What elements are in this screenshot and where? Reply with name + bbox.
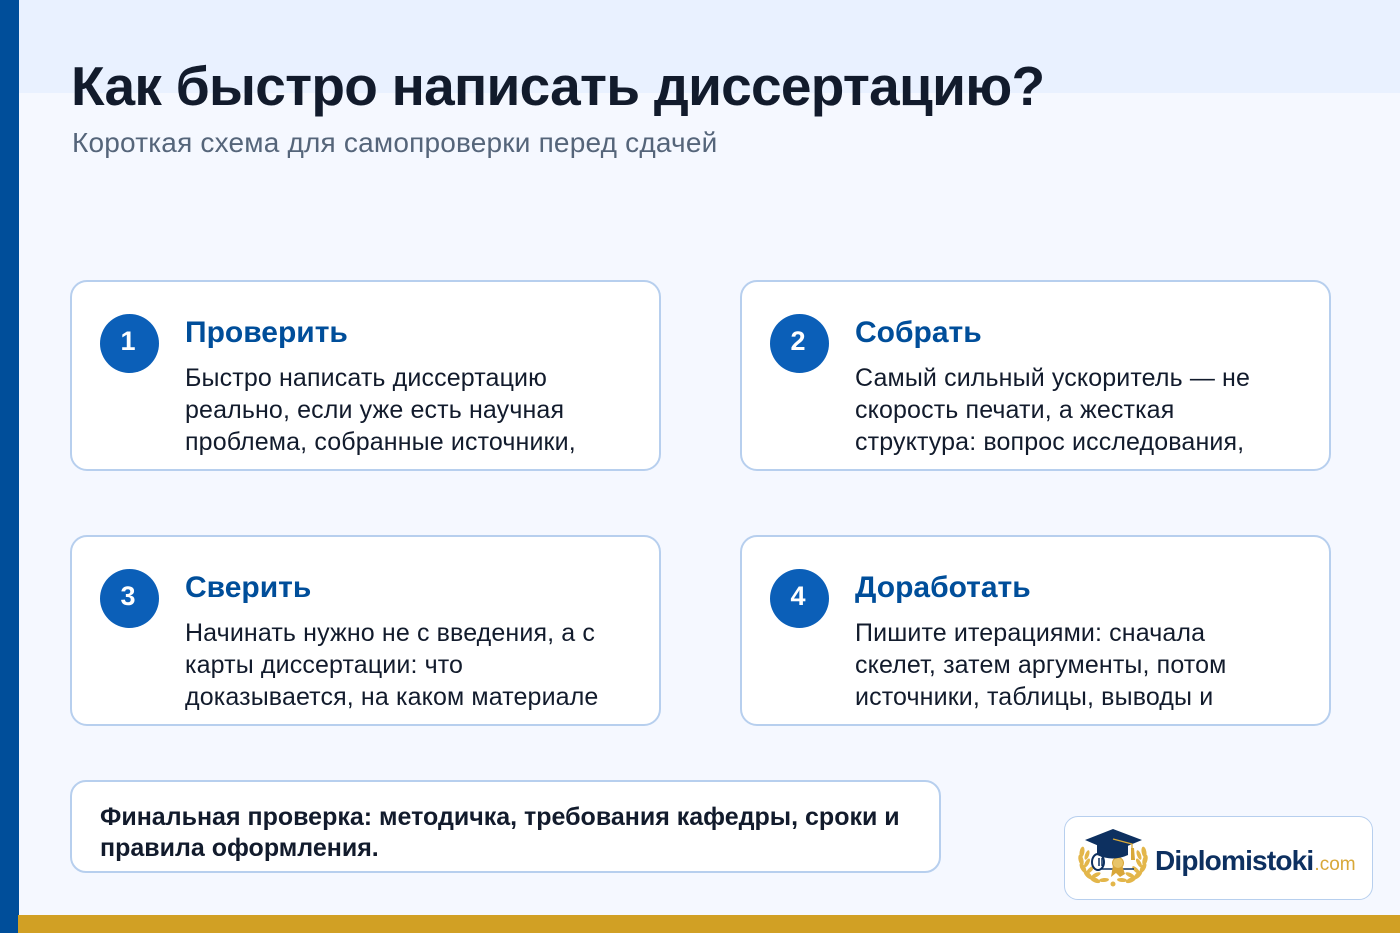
step 4 number <box>770 569 829 628</box>
subtitle: Короткая схема для самопроверки перед сдачей <box>72 127 717 158</box>
step 1 number <box>100 314 159 373</box>
step 2 heading: Собрать <box>855 316 982 349</box>
step 1 text: реально, если уже есть научная <box>185 396 564 424</box>
step 4 text <box>855 619 1226 711</box>
step 3 text: карты диссертации: что <box>185 651 463 679</box>
step 2 number <box>770 314 829 373</box>
step 3 number <box>100 569 159 628</box>
step 2 text <box>855 364 1250 456</box>
step 2 number: 2 <box>790 326 806 356</box>
step 1 text: проблема, собранные источники, <box>185 428 576 456</box>
panel: step 1 <box>70 280 661 471</box>
step 3 text: доказывается, на каком материале <box>185 683 598 711</box>
icon: graduation cap with laurel <box>1078 829 1148 886</box>
final check text: Финальная проверка: методичка, требования кафедры, сроки и <box>100 803 900 831</box>
left accent bar <box>0 0 19 933</box>
title: Как быстро написать диссертацию? <box>71 55 1044 117</box>
step 4 number: 4 <box>790 581 806 611</box>
step 2 text: скорость печати, а жесткая <box>855 396 1174 424</box>
step 4 text: источники, таблицы, выводы и <box>855 683 1213 711</box>
panel: step 2 <box>740 280 1331 471</box>
step 1 number: 1 <box>120 326 136 356</box>
panel: final check <box>70 780 941 873</box>
step 1 heading: Проверить <box>185 316 348 349</box>
logo wordmark: Diplomistoki.com <box>1155 845 1356 876</box>
panel: step 4 <box>740 535 1331 726</box>
logo card <box>1064 816 1373 900</box>
panel: step 3 <box>70 535 661 726</box>
final check text <box>100 803 900 862</box>
bottom accent bar <box>18 915 1400 933</box>
step 3 text <box>185 619 598 711</box>
step 3 number: 3 <box>120 581 136 611</box>
step 2 text: Самый сильный ускоритель — не <box>855 364 1250 392</box>
step 4 text: Пишите итерациями: сначала <box>855 619 1205 647</box>
step 1 text: Быстро написать диссертацию <box>185 364 547 392</box>
step 2 text: структура: вопрос исследования, <box>855 428 1244 456</box>
top band <box>19 0 1400 93</box>
step 4 heading: Доработать <box>855 571 1031 604</box>
final check text: правила оформления. <box>100 834 379 862</box>
step 1 text <box>185 364 576 456</box>
step 3 heading: Сверить <box>185 571 311 604</box>
step 3 text: Начинать нужно не с введения, а с <box>185 619 595 647</box>
step 4 text: скелет, затем аргументы, потом <box>855 651 1226 679</box>
